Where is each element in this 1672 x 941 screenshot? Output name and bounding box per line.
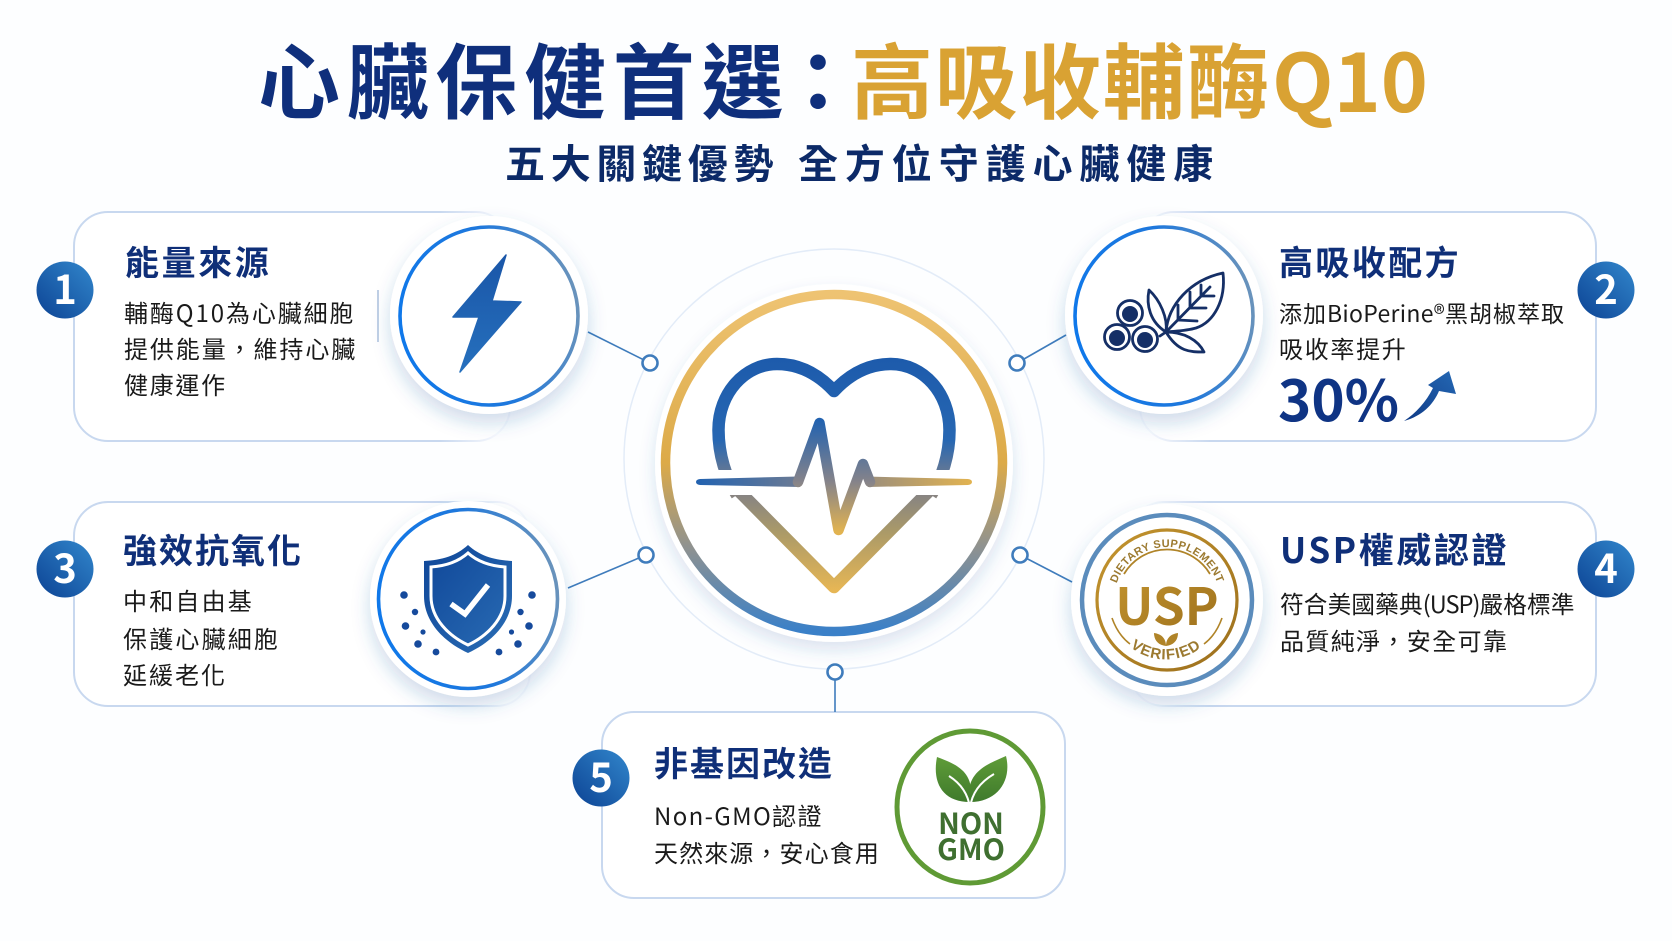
icon: USP verified seal: DIETARY SUPPLEMENT	[1110, 539, 1224, 583]
badge 4	[1578, 537, 1634, 598]
icon: shield medallion	[370, 501, 566, 697]
heading: USP: USP權威認證	[1280, 523, 1509, 574]
title: 心臟保健首選	[258, 17, 790, 136]
title: 高吸收輔酶	[851, 17, 1271, 136]
connector lines and nodes	[568, 332, 1072, 712]
text: antioxidant body: 延緩老化	[123, 656, 227, 691]
icon: USP verified seal: USP	[1115, 566, 1219, 640]
title: Q10	[1272, 20, 1428, 136]
heading: high absorption: 高吸收配方	[1279, 236, 1461, 285]
subtitle	[505, 132, 1220, 190]
badge 1: 1	[53, 258, 77, 316]
text: non-GMO body: 天然來源，安心食用	[654, 834, 880, 869]
icon: non-GMO seal: NON	[938, 801, 1004, 843]
badge 5: 5	[589, 746, 613, 804]
central heart medallion	[655, 284, 1013, 642]
badge 2: 2	[1594, 258, 1618, 316]
icon: non-GMO seal: GMO	[937, 827, 1005, 869]
heading: antioxidant: 強效抗氧化	[123, 524, 303, 573]
text: non-GMO body	[654, 797, 880, 869]
badge 3: 3	[53, 537, 77, 595]
icon: lightning bolt medallion	[390, 216, 588, 414]
badge 4: 4	[1594, 537, 1618, 595]
title: ：	[777, 17, 859, 136]
text: high absorption body: 添加BioPerine®黑胡椒萃取	[1279, 295, 1565, 329]
badge 3	[36, 537, 94, 598]
heading: non-GMO: 非基因改造	[654, 737, 834, 786]
text: high absorption body: 吸收率提升	[1279, 330, 1408, 365]
icon: heart outline	[718, 364, 950, 587]
text: non-GMO body: Non-GMO認證	[654, 797, 823, 832]
text: USP body: 符合美國藥典(USP)嚴格標準	[1280, 586, 1575, 620]
panel: non-GMO card	[602, 712, 1065, 898]
text: high absorption body	[1279, 295, 1565, 365]
central faint ring	[624, 249, 1044, 669]
stat: 30%: 30%	[1278, 356, 1399, 438]
heading: energy source: 能量來源	[125, 236, 271, 285]
icon: USP verified seal: VERIFIED	[1133, 638, 1199, 660]
icon: pepper leaf medallion	[1065, 216, 1263, 414]
text: USP body: 品質純淨，安全可靠	[1280, 622, 1508, 657]
subtitle: 五大關鍵優勢	[505, 132, 779, 190]
text: antioxidant body: 中和自由基	[123, 582, 254, 617]
icon: pulse line	[696, 423, 972, 530]
panel: USP card	[1130, 502, 1596, 706]
badge 1	[36, 258, 94, 318]
text: energy source body	[124, 294, 357, 401]
text: antioxidant body: 保護心臟細胞	[123, 620, 280, 655]
badge 5	[572, 746, 630, 806]
icon: non-GMO seal	[897, 731, 1043, 883]
text: antioxidant body	[123, 582, 280, 691]
badge 2	[1578, 258, 1634, 318]
panel: antioxidant card	[74, 502, 530, 706]
arrow: upward trend	[1404, 371, 1456, 421]
text: USP body	[1280, 586, 1575, 657]
text: energy source body: 提供能量，維持心臟	[124, 330, 357, 365]
text: energy source body: 輔酶Q10為心臟細胞	[124, 294, 355, 329]
title	[258, 17, 1428, 136]
icon: USP verified seal	[1062, 506, 1272, 714]
divider beside energy text	[377, 290, 379, 342]
panel: energy source card	[74, 212, 510, 441]
text: energy source body: 健康運作	[124, 366, 227, 401]
subtitle: 全方位守護心臟健康	[798, 132, 1220, 190]
panel: high absorption card	[1140, 212, 1596, 441]
